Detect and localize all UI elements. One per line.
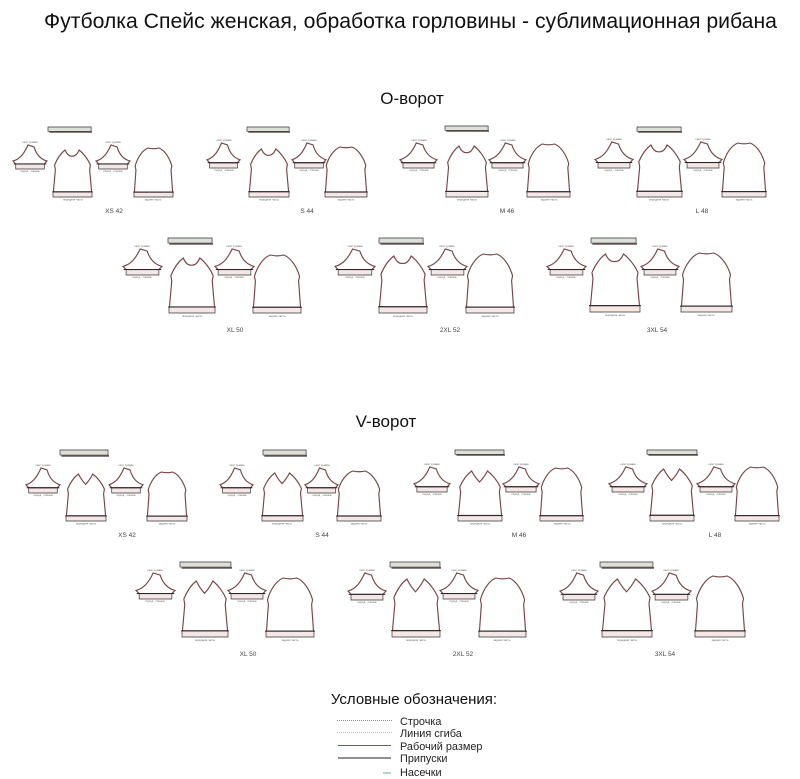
back piece xyxy=(146,472,188,526)
sleeve: перед спинка xyxy=(34,493,53,497)
back piece: задняя часть xyxy=(736,198,753,202)
sleeve: перед спинка xyxy=(512,492,531,496)
sleeve xyxy=(595,137,633,172)
size label: 2XL 52 xyxy=(453,651,474,658)
neck rib strip xyxy=(168,238,213,245)
size label: XL 50 xyxy=(227,327,244,334)
back piece xyxy=(252,255,302,318)
sleeve: перед спинка xyxy=(450,599,469,603)
sleeve: перед спинка xyxy=(499,168,518,172)
back piece: задняя часть xyxy=(541,198,558,202)
sleeve xyxy=(641,244,679,279)
sleeve xyxy=(440,568,478,603)
sleeve xyxy=(335,244,375,279)
neck rib strip xyxy=(60,450,109,457)
sleeve xyxy=(428,244,467,279)
back piece: задняя часть xyxy=(269,314,286,318)
legend item: working size: Рабочий размер xyxy=(400,741,482,753)
sleeve: окат рукава xyxy=(118,463,134,467)
sleeve xyxy=(109,463,143,497)
back piece xyxy=(265,578,315,642)
sleeve: перед спинка xyxy=(104,169,123,173)
sleeve xyxy=(697,462,735,496)
back piece: задняя часть xyxy=(145,198,162,202)
sleeve: перед спинка xyxy=(228,493,247,497)
legend title: Условные обозначения: xyxy=(331,691,497,708)
heading: V-neck section: V-ворот xyxy=(356,412,417,431)
back piece: задняя часть xyxy=(494,638,511,642)
legend item: fold line: Линия сгиба xyxy=(400,728,463,740)
sleeve xyxy=(136,568,175,603)
sleeve xyxy=(547,244,586,279)
front piece: передняя часть xyxy=(195,638,216,642)
neck rib strip xyxy=(48,127,92,133)
sleeve: перед спинка xyxy=(694,168,713,172)
front piece: передняя часть xyxy=(76,522,97,526)
back piece xyxy=(465,254,515,318)
sleeve: окат рукава xyxy=(216,138,232,142)
sleeve: окат рукава xyxy=(620,462,636,466)
front piece xyxy=(601,579,653,642)
sleeve xyxy=(503,462,539,496)
sleeve: окат рукава xyxy=(652,244,668,248)
front piece xyxy=(445,146,489,202)
front piece xyxy=(181,581,229,642)
sleeve xyxy=(215,244,254,279)
back piece xyxy=(324,147,368,202)
sleeve: окат рукава xyxy=(558,244,574,248)
pattern set: O-neck M 46 xyxy=(400,126,571,215)
legend item: stitching: Строчка xyxy=(400,716,442,728)
sleeve xyxy=(305,463,338,497)
sleeve xyxy=(489,138,526,172)
back piece xyxy=(478,578,527,642)
neck rib strip xyxy=(180,562,232,569)
size label: M 46 xyxy=(500,208,515,215)
neck rib strip xyxy=(647,450,698,456)
front piece xyxy=(52,150,93,202)
pattern set: V-neck XS 42 xyxy=(26,450,188,539)
front piece: передняя часть xyxy=(259,198,280,202)
legend item: notches: Насечки xyxy=(400,767,442,779)
size label: M 46 xyxy=(512,532,527,539)
sleeve: перед спинка xyxy=(570,600,589,604)
sleeve: перед спинка xyxy=(605,168,624,172)
sleeve xyxy=(400,138,437,172)
sleeve: перед спинка xyxy=(358,600,377,604)
neck rib strip xyxy=(600,562,654,569)
sleeve: перед спинка xyxy=(225,275,244,279)
sleeve: окат рукава xyxy=(451,568,467,572)
size label: 3XL 54 xyxy=(655,651,676,658)
back piece xyxy=(133,148,174,202)
neck rib strip xyxy=(390,562,441,569)
size label: 2XL 52 xyxy=(440,327,461,334)
sleeve: окат рукава xyxy=(229,463,245,467)
sleeve xyxy=(96,140,130,173)
front piece: передняя часть xyxy=(406,638,427,642)
front piece xyxy=(457,471,503,526)
pattern set: O-neck S 44 xyxy=(207,127,368,215)
back piece: задняя часть xyxy=(749,522,766,526)
sleeve: окат рукава xyxy=(226,244,242,248)
front piece xyxy=(391,579,441,642)
sleeve: окат рукава xyxy=(239,568,255,572)
front piece: передняя часть xyxy=(63,198,84,202)
front piece: передняя часть xyxy=(393,314,414,318)
back piece: задняя часть xyxy=(338,198,355,202)
back piece: задняя часть xyxy=(554,522,571,526)
sleeve xyxy=(26,463,60,497)
sleeve: окат рукава xyxy=(147,568,163,572)
pattern set: V-neck XL 50 xyxy=(136,562,315,658)
front piece: передняя часть xyxy=(649,198,670,202)
sleeve: перед спинка xyxy=(423,492,442,496)
pattern set: O-neck 2XL 52 xyxy=(335,238,515,334)
front piece xyxy=(261,473,304,526)
sleeve: перед спинка xyxy=(410,168,429,172)
sleeve: окат рукава xyxy=(708,462,724,466)
back piece: задняя часть xyxy=(698,313,715,317)
pattern set: O-neck 3XL 54 xyxy=(547,238,733,334)
front piece xyxy=(378,256,428,318)
size label: L 48 xyxy=(709,532,722,539)
sleeve: перед спинка xyxy=(21,169,40,173)
sleeve xyxy=(207,138,240,172)
sleeve xyxy=(220,463,253,497)
sleeve: перед спинка xyxy=(300,168,319,172)
back piece xyxy=(680,253,733,317)
sleeve xyxy=(609,462,647,496)
front piece: передняя часть xyxy=(470,522,491,526)
pattern set: O-neck L 48 xyxy=(595,127,767,215)
sleeve xyxy=(652,568,691,604)
size label: S 44 xyxy=(315,532,329,539)
pattern set: V-neck S 44 xyxy=(220,450,382,539)
sleeve: перед спинка xyxy=(313,493,332,497)
back piece: задняя часть xyxy=(282,638,299,642)
pattern set: V-neck 3XL 54 xyxy=(560,562,746,658)
sleeve: окат рукава xyxy=(424,462,440,466)
legend xyxy=(331,691,497,779)
sleeve: окат рукава xyxy=(347,244,363,248)
pattern set: V-neck 2XL 52 xyxy=(348,562,527,658)
size label: 3XL 54 xyxy=(647,327,668,334)
sleeve xyxy=(123,244,162,279)
sleeve: окат рукава xyxy=(134,244,150,248)
neck rib strip xyxy=(455,450,505,456)
neck rib strip xyxy=(445,126,489,132)
legend item: allowances xyxy=(338,753,447,765)
back piece xyxy=(694,576,746,642)
front piece: передняя часть xyxy=(457,198,478,202)
size label: XS 42 xyxy=(118,532,136,539)
sleeve: перед спинка xyxy=(146,599,165,603)
back piece xyxy=(336,471,382,526)
back piece xyxy=(539,468,584,526)
title: Футболка Спейс женская, обработка горловины - сублимационная рибана xyxy=(44,10,777,33)
back piece xyxy=(734,467,780,526)
size label: XL 50 xyxy=(240,651,257,658)
front piece xyxy=(636,145,683,202)
front piece xyxy=(248,149,290,202)
sleeve: окат рукава xyxy=(513,462,529,466)
neck rib strip xyxy=(379,238,424,245)
pattern set: V-neck L 48 xyxy=(609,450,780,539)
sleeve: окат рукава xyxy=(105,140,121,144)
back piece xyxy=(526,144,571,202)
sleeve: окат рукава xyxy=(663,568,679,572)
sleeve: окат рукава xyxy=(314,463,330,467)
sleeve: перед спинка xyxy=(619,492,638,496)
sleeve: окат рукава xyxy=(606,137,622,141)
sleeve: перед спинка xyxy=(662,600,681,604)
neck rib strip xyxy=(591,238,637,245)
legend item: allowances: Припуски xyxy=(400,753,447,765)
back piece: задняя часть xyxy=(351,522,368,526)
sleeve: перед спинка xyxy=(557,275,576,279)
neck rib strip xyxy=(263,450,307,457)
front piece xyxy=(589,254,641,317)
sleeve xyxy=(228,568,266,603)
sleeve: перед спинка xyxy=(651,275,670,279)
sleeve: окат рукава xyxy=(411,138,427,142)
sleeve xyxy=(414,462,450,496)
sleeve: окат рукава xyxy=(301,138,317,142)
sleeve: перед спинка xyxy=(438,275,457,279)
front piece xyxy=(65,474,107,526)
pattern set: O-neck XL 50 xyxy=(123,238,302,334)
sleeve xyxy=(292,138,326,172)
front piece: передняя часть xyxy=(662,522,683,526)
legend item: fold line xyxy=(337,728,463,740)
front piece: передняя часть xyxy=(605,313,626,317)
front piece: передняя часть xyxy=(272,522,293,526)
sleeve xyxy=(348,568,386,604)
sleeve: окат рукава xyxy=(439,244,455,248)
size label: S 44 xyxy=(300,208,314,215)
pattern set: V-neck M 46 xyxy=(414,450,584,539)
sleeve: перед спинка xyxy=(133,275,152,279)
front piece: передняя часть xyxy=(182,314,203,318)
sleeve xyxy=(560,568,598,604)
back piece: задняя часть xyxy=(712,638,729,642)
sleeve: окат рукава xyxy=(22,140,38,144)
heading: O-neck section: О-ворот xyxy=(380,89,444,108)
sleeve: окат рукава xyxy=(359,568,375,572)
sleeve: окат рукава xyxy=(695,137,711,141)
sleeve: окат рукава xyxy=(571,568,587,572)
sleeve: перед спинка xyxy=(707,492,726,496)
back piece: задняя часть xyxy=(482,314,499,318)
sleeve: перед спинка xyxy=(238,599,257,603)
front piece xyxy=(649,469,695,526)
back piece xyxy=(721,143,767,202)
sleeve: перед спинка xyxy=(346,275,365,279)
sleeve xyxy=(684,137,722,172)
front piece: передняя часть xyxy=(617,638,638,642)
neck rib strip xyxy=(247,127,290,133)
sleeve: окат рукава xyxy=(35,463,51,467)
neck rib strip xyxy=(637,127,682,133)
sleeve: перед спинка xyxy=(117,493,136,497)
sleeve: окат рукава xyxy=(500,138,516,142)
sleeve xyxy=(13,140,47,173)
size label: L 48 xyxy=(696,208,709,215)
legend item: stitching xyxy=(337,716,442,728)
back piece: задняя часть xyxy=(159,522,176,526)
size label: XS 42 xyxy=(105,208,123,215)
pattern set: O-neck XS 42 xyxy=(13,127,174,215)
front piece xyxy=(168,258,216,318)
sleeve: перед спинка xyxy=(215,168,234,172)
